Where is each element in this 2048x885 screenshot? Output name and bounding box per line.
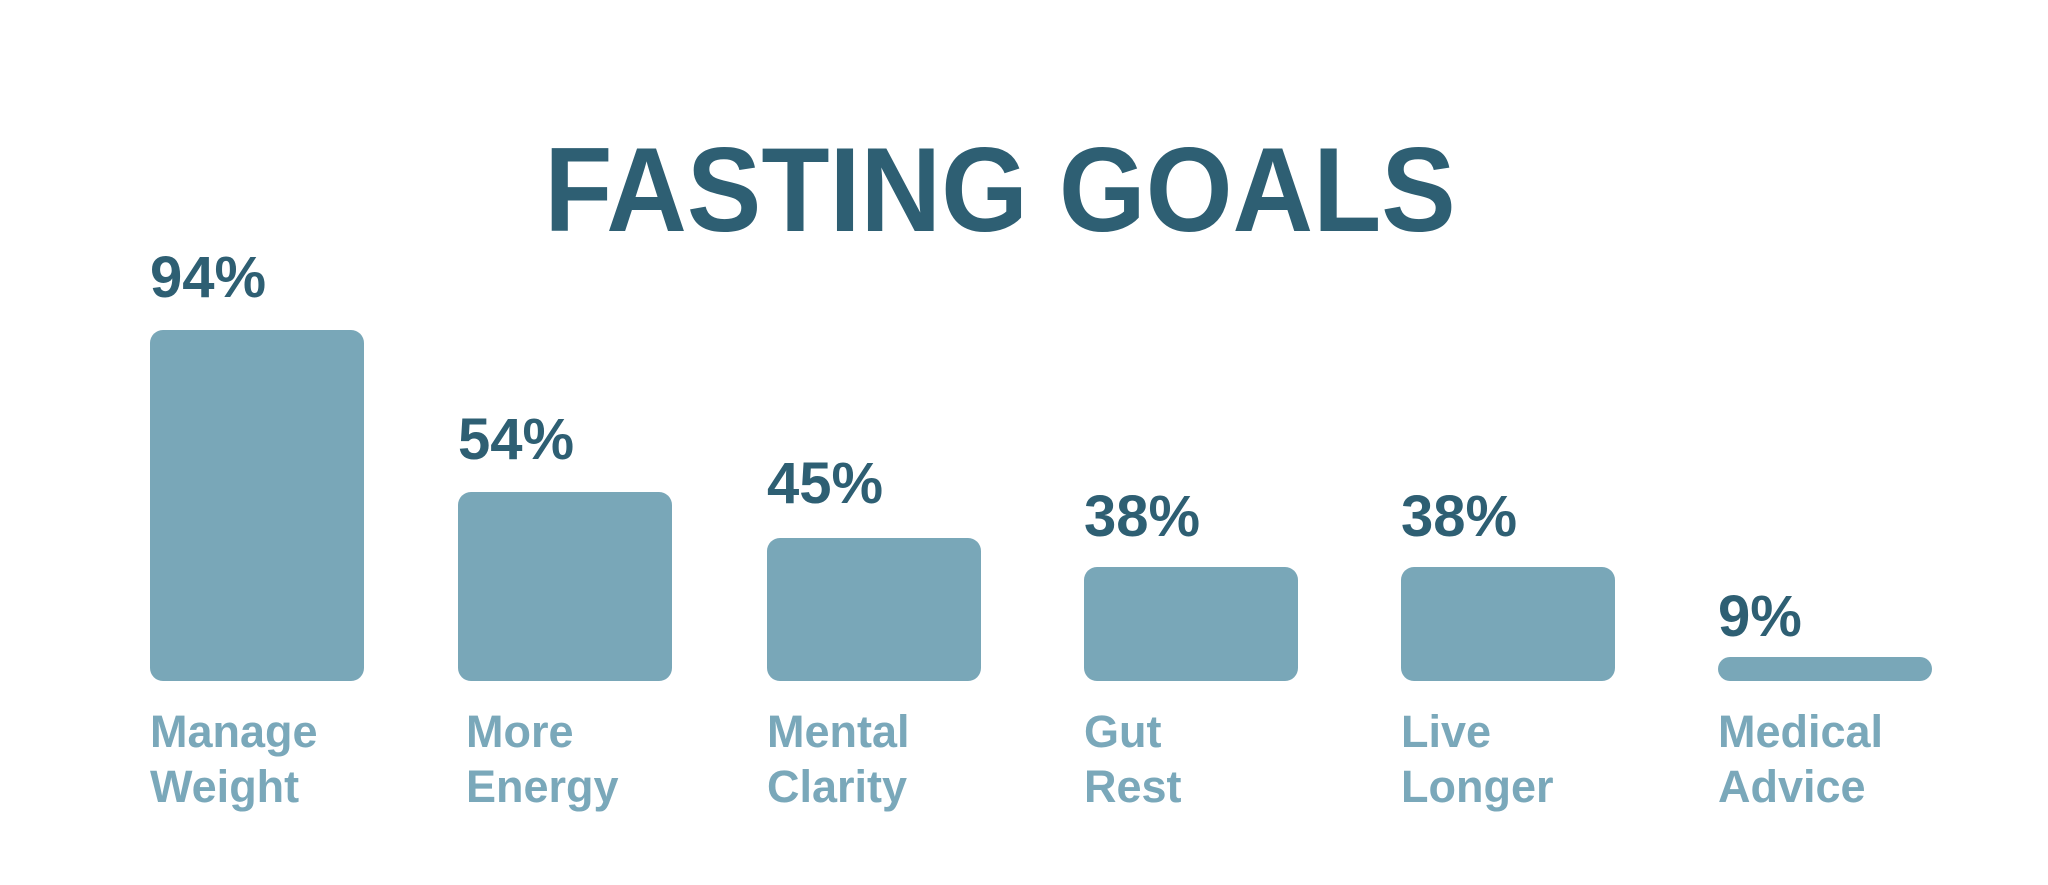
label: Manage Weight: Weight — [150, 761, 299, 812]
value: 38% Live Longer: 38% — [1401, 484, 1517, 549]
bar: Live Longer — [1401, 567, 1615, 681]
label: Medical Advice: Medical — [1718, 706, 1883, 757]
bar: More Energy — [458, 492, 672, 681]
label: Medical Advice — [1718, 706, 1883, 812]
label: Gut Rest: Rest — [1084, 761, 1182, 812]
bar: Mental Clarity — [767, 538, 981, 681]
label: Mental Clarity — [767, 706, 910, 812]
label: Gut Rest — [1084, 706, 1182, 812]
label: Mental Clarity: Clarity — [767, 761, 907, 812]
value: 45%: 45% — [767, 451, 883, 516]
bar: Medical Advice — [1718, 657, 1932, 681]
label: Medical Advice: Advice — [1718, 761, 1866, 812]
label: Mental Clarity: Mental — [767, 706, 910, 757]
label: Live Longer: Live — [1401, 706, 1491, 757]
value: 94%: 94% — [150, 245, 266, 310]
label: Gut Rest: Gut — [1084, 706, 1161, 757]
label: Live Longer: Longer — [1401, 761, 1554, 812]
bar: Gut Rest — [1084, 567, 1298, 681]
title: FASTING GOALS — [544, 123, 1456, 257]
value: 54%: 54% — [458, 407, 574, 472]
value: 9%: 9% — [1718, 584, 1802, 649]
label: More Energy — [466, 706, 619, 812]
label: Manage Weight: Manage — [150, 706, 318, 757]
label: More Energy: More — [466, 706, 574, 757]
label: Live Longer — [1401, 706, 1554, 812]
label: More Energy: Energy — [466, 761, 619, 812]
bar: Manage Weight — [150, 330, 364, 681]
value: 38% Gut Rest: 38% — [1084, 484, 1200, 549]
label: Manage Weight — [150, 706, 318, 812]
